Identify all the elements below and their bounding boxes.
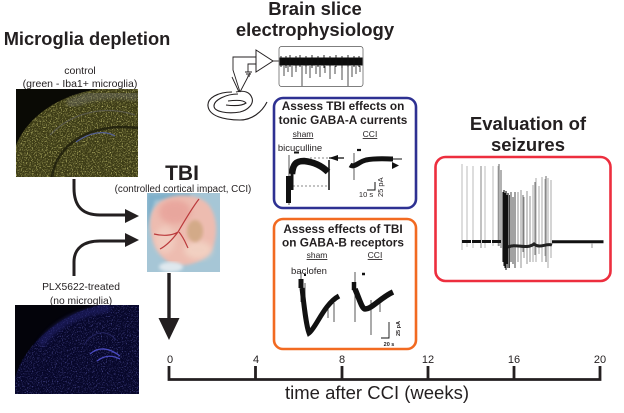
heading: microglia depletion: Microglia depletion — [4, 28, 170, 49]
caption: PLX5622-treated: PLX5622-treated — [42, 282, 120, 293]
arrow: TBI to timeline start — [158, 273, 180, 340]
image: PLX5622-treated brain section — [15, 305, 139, 394]
panel: seizure EEG trace — [436, 157, 610, 281]
tick labels: 8 — [339, 354, 345, 366]
scale bar: GABA-B: 25 pA — [396, 321, 402, 336]
tick labels: 4 — [253, 354, 259, 366]
trace: seizure recording — [462, 164, 604, 270]
scale bar: GABA-A: 25 pA — [376, 177, 385, 197]
caption: control: (green - Iba1+ microglia) — [23, 78, 137, 90]
heading: brain slice electrophysiology: electrophysiology — [236, 19, 395, 40]
trace: CCI GABA-B — [354, 272, 393, 335]
icon: recording setup with amplifier and brain slice — [208, 50, 279, 120]
arrow: PLX5622 to TBI — [74, 233, 139, 276]
trace: sham GABA-A — [288, 152, 344, 205]
panel title: GABA-B: Assess effects of TBI — [283, 222, 403, 236]
scale bar: GABA-A: 10 s — [359, 190, 373, 199]
panel: GABA-B receptors — [274, 219, 416, 349]
caption: controlled cortical impact: (controlled cortical impact, CCI) — [115, 184, 251, 195]
trace: CCI GABA-A — [350, 150, 402, 180]
trace: sham GABA-B — [301, 272, 339, 333]
timeline axis — [167, 354, 606, 380]
tick labels: 12 — [422, 354, 434, 366]
label: baclofen: baclofen — [291, 266, 327, 277]
panel: tonic GABA-A currents — [274, 98, 416, 208]
arrow: control to TBI — [74, 179, 139, 223]
image: control brain section with microglia — [16, 89, 138, 177]
tick labels — [167, 354, 606, 366]
caption: control: control — [64, 65, 96, 77]
tick labels: 16 — [508, 354, 520, 366]
tick labels: 20 — [594, 354, 606, 366]
scale bar: GABA-A — [359, 177, 385, 199]
label: bicuculline: bicuculline — [278, 143, 322, 154]
axis title: time after CCI (weeks) — [285, 382, 469, 403]
heading: TBI: TBI — [165, 162, 199, 185]
label: CCI: CCI — [368, 250, 382, 260]
panel title: tonic GABA-A: tonic GABA-A currents — [279, 113, 408, 127]
icon: sham baseline arrowhead — [329, 155, 338, 161]
label: sham: sham — [307, 250, 327, 260]
caption: PLX5622-treated: (no microglia) — [50, 296, 112, 307]
heading: evaluation of seizures: seizures — [491, 134, 565, 155]
scale bar: GABA-B — [381, 321, 402, 348]
label: sham: sham — [293, 129, 313, 139]
image: injured brain photograph — [147, 193, 220, 272]
label: CCI: CCI — [363, 129, 377, 139]
scale bar: GABA-B: 20 s — [384, 342, 394, 348]
trace panel: recording — [279, 46, 363, 86]
heading: evaluation of seizures: Evaluation of — [470, 113, 587, 134]
panel title: tonic GABA-A: Assess TBI effects on — [282, 99, 404, 113]
icon: CCI arrowhead — [392, 162, 399, 169]
tick labels: 0 — [167, 354, 173, 366]
panel title: GABA-B: on GABA-B receptors — [282, 236, 404, 250]
